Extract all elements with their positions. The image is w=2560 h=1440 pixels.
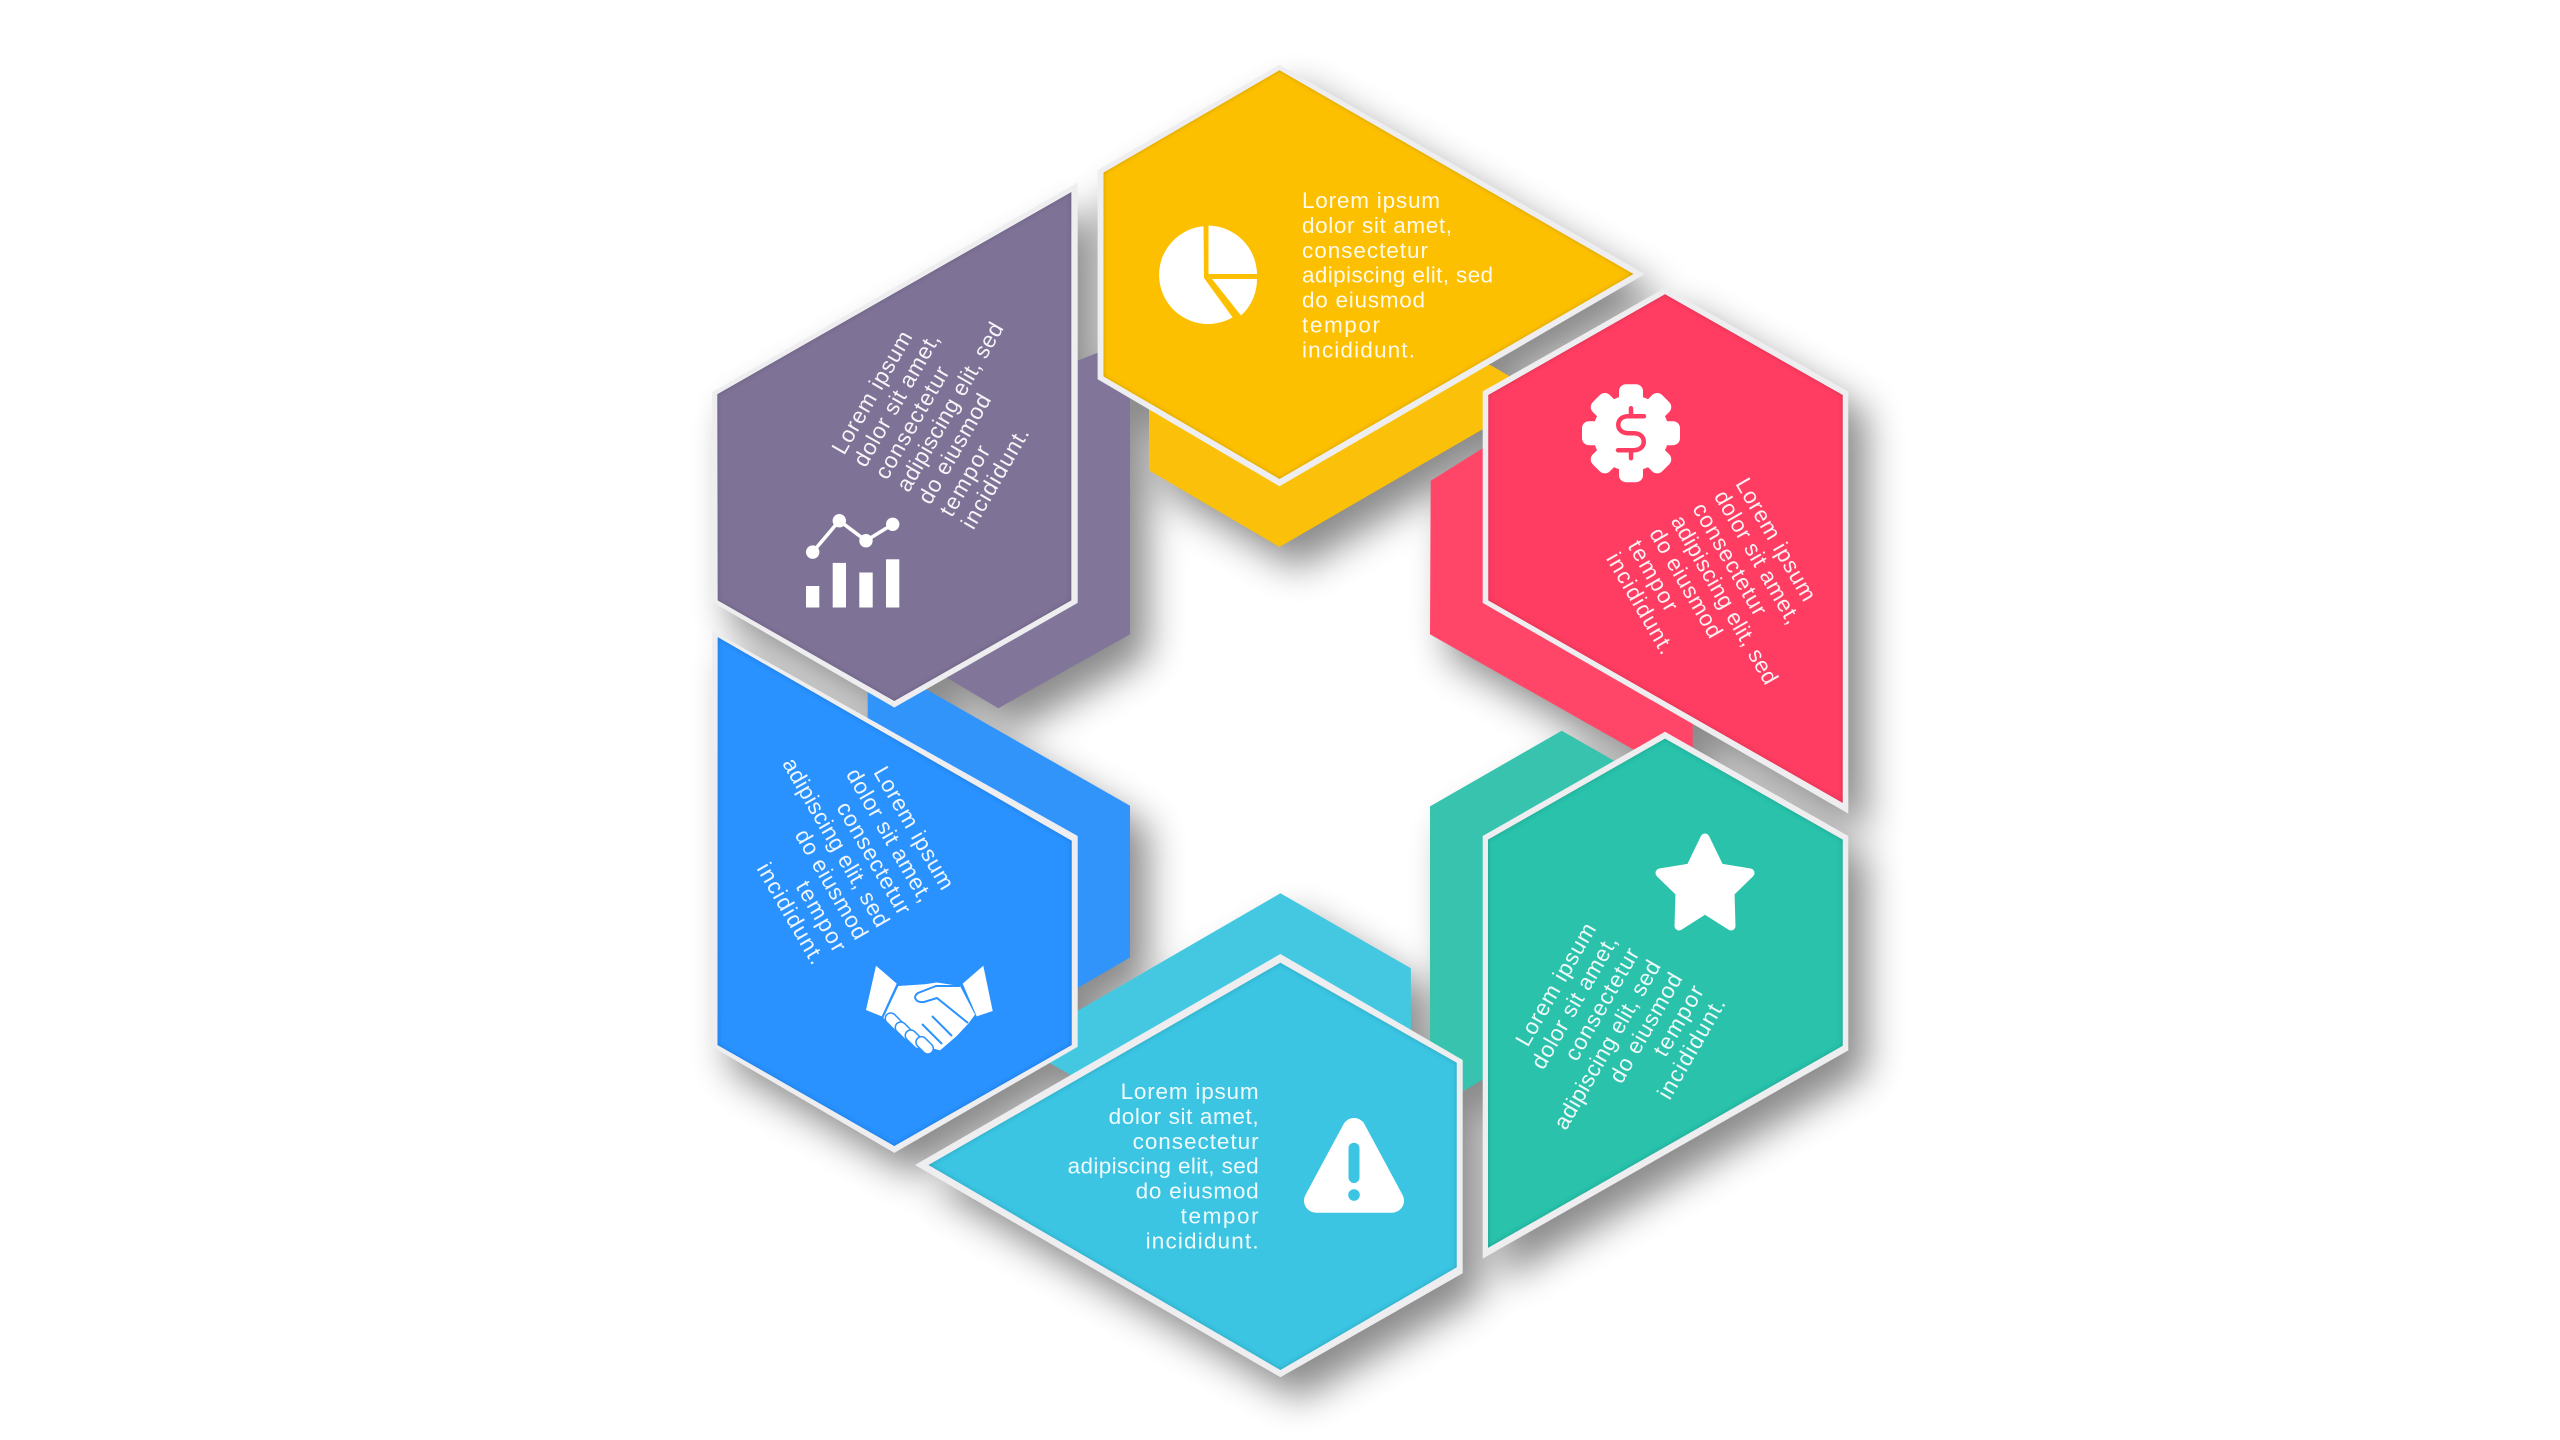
panel: red — [1483, 288, 1848, 814]
icon: star — [1660, 838, 1750, 926]
back hexagon: blue — [868, 640, 1130, 988]
drop shadows — [730, 87, 1866, 1399]
text: red panel: Lorem ipsum — [1731, 474, 1821, 606]
text: cyan panel: adipiscing elit, sed — [1068, 1154, 1259, 1179]
icon: bar and line chart — [806, 514, 899, 608]
back hexagon: cyan — [1019, 893, 1411, 1150]
text: blue panel: do eiusmod — [790, 825, 873, 944]
icon: warning triangle — [1316, 1130, 1392, 1201]
text: blue panel: adipiscing elit, sed — [777, 753, 895, 931]
back hexagon: yellow — [1149, 300, 1542, 547]
text: blue panel: dolor sit amet, — [841, 764, 938, 906]
panel: purple — [712, 182, 1078, 708]
back hexagon: red — [1430, 400, 1693, 783]
text: teal panel: adipiscing elit, sed — [1549, 956, 1666, 1134]
text: purple panel: do eiusmod — [913, 389, 996, 508]
text: blue panel: consectetur — [832, 797, 916, 919]
text: cyan panel: Lorem ipsum — [1121, 1079, 1259, 1104]
text: purple panel: tempor — [934, 440, 995, 521]
text: yellow panel: dolor sit amet, — [1302, 213, 1452, 238]
text: cyan panel: do eiusmod — [1136, 1179, 1259, 1204]
text: purple panel: adipiscing elit, sed — [891, 318, 1009, 496]
text: blue panel: Lorem ipsum — [869, 762, 959, 894]
text: cyan panel: consectetur — [1133, 1129, 1259, 1154]
text: yellow panel: Lorem ipsum — [1302, 188, 1440, 213]
text: cyan panel: tempor — [1181, 1204, 1259, 1228]
text: yellow panel: incididunt. — [1302, 337, 1415, 362]
text: teal panel: do eiusmod — [1604, 968, 1687, 1087]
icon: pie chart — [1159, 226, 1257, 324]
text: red panel: do eiusmod — [1644, 523, 1728, 642]
text: cyan panel: incididunt. — [1146, 1228, 1259, 1253]
text: red panel: consectetur — [1688, 498, 1772, 620]
text: yellow panel: consectetur — [1302, 238, 1428, 263]
text: yellow panel — [1302, 188, 1493, 362]
panel: yellow — [1098, 65, 1645, 486]
text: teal panel: tempor — [1648, 980, 1709, 1061]
panel: blue — [712, 631, 1078, 1153]
text: teal panel — [1484, 918, 1731, 1171]
text: blue panel: tempor — [791, 876, 852, 957]
text: red panel: dolor sit amet, — [1709, 486, 1806, 628]
text: red panel: incididunt. — [1601, 548, 1679, 659]
text: red panel: tempor — [1623, 536, 1684, 616]
text: yellow panel: do eiusmod — [1302, 288, 1425, 313]
text: blue panel — [713, 716, 960, 969]
text: cyan panel: dolor sit amet, — [1109, 1104, 1259, 1129]
text: yellow panel: tempor — [1302, 312, 1380, 338]
text: red panel — [1601, 474, 1848, 726]
panel: teal — [1483, 732, 1848, 1259]
text: teal panel: Lorem ipsum — [1510, 918, 1601, 1051]
back hexagon: purple — [900, 340, 1130, 708]
text: cyan panel — [1068, 1079, 1259, 1253]
text: purple panel: Lorem ipsum — [827, 326, 917, 458]
text: purple panel: consectetur — [870, 361, 955, 483]
icon: gear with dollar sign — [1582, 384, 1680, 482]
panel: cyan — [915, 954, 1463, 1377]
text: blue panel: incididunt. — [752, 858, 830, 969]
text: purple panel — [827, 281, 1073, 533]
text: purple panel: incididunt. — [956, 423, 1034, 533]
text: teal panel: consectetur — [1560, 943, 1644, 1065]
back hexagon: teal — [1430, 731, 1700, 1110]
text: purple panel: dolor sit amet, — [848, 329, 945, 471]
icon: handshake — [866, 966, 993, 1056]
text: yellow panel: adipiscing elit, sed — [1302, 263, 1493, 288]
text: teal panel: dolor sit amet, — [1526, 931, 1623, 1073]
text: red panel: adipiscing elit, sed — [1666, 511, 1783, 689]
text: teal panel: incididunt. — [1652, 993, 1730, 1104]
